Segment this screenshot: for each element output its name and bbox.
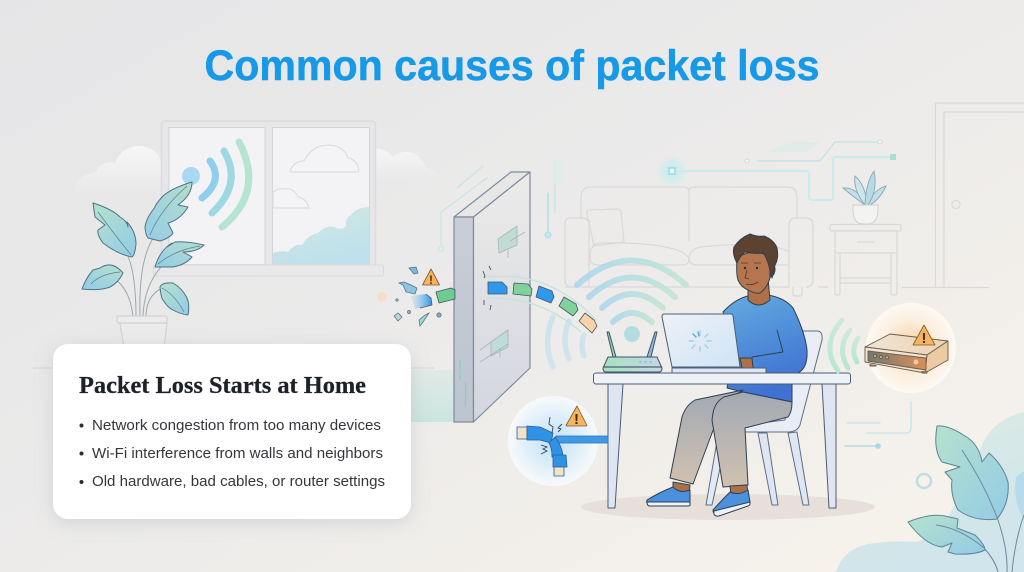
person: face: [737, 252, 770, 293]
left window pane: [169, 128, 265, 264]
wall: [454, 172, 530, 422]
packet: blue: [536, 286, 554, 303]
crack marks: [483, 266, 491, 310]
data packets: [411, 282, 597, 333]
decorative ring: [917, 474, 931, 488]
bullet list: Wi-Fi interference from walls and neighbors: [92, 446, 383, 462]
bullet list: Old hardware, bad cables, or router settings: [92, 474, 385, 490]
plant stems: [108, 230, 172, 317]
wall top: [454, 172, 530, 217]
outside clouds and hills: [273, 145, 369, 264]
old hardware callout: [865, 303, 956, 393]
router: [603, 332, 662, 372]
upper right leaf: [145, 182, 192, 241]
chair: [706, 331, 822, 505]
plant pot: [117, 316, 167, 348]
big leaf: [936, 426, 1008, 520]
room line art: door: [902, 103, 1024, 288]
packet: orange: [579, 313, 597, 333]
cable horizontal: [556, 436, 608, 443]
icon: window wi-fi signal: [182, 142, 249, 227]
person: rear ankle: [673, 482, 690, 495]
bullet list: Network congestion from too many devices: [92, 418, 381, 434]
cable connectors: [517, 426, 567, 476]
router body: [603, 357, 662, 372]
circuit lines: upper right: [656, 140, 896, 200]
person: front shoe: [713, 490, 750, 514]
person: front ankle: [730, 485, 748, 495]
person: facial features: [744, 267, 758, 269]
title: Common causes of packet loss: [204, 43, 820, 90]
icon: warning near wall: [422, 269, 440, 287]
person: hand: [740, 358, 753, 368]
desk left leg: [608, 384, 623, 508]
packet: green emerging: [436, 288, 455, 303]
plant: left: [82, 182, 204, 317]
circuit lines: lower right: [845, 402, 911, 449]
person: hair: [733, 234, 778, 278]
packet: green: [513, 283, 532, 296]
bottom right blob: [836, 412, 1024, 572]
packet debris: [377, 267, 441, 326]
packet stream guide lines: [487, 276, 597, 332]
wall front: [474, 172, 530, 422]
router wi-fi arcs: [577, 260, 686, 342]
right window pane: [272, 128, 370, 264]
packet: blue fading: [411, 294, 432, 309]
wall damage marks: [480, 226, 525, 362]
low leaf: [908, 515, 985, 554]
clouds behind window: [75, 146, 441, 193]
window: [154, 121, 384, 276]
small potted plant: [843, 171, 886, 224]
device: [865, 334, 948, 373]
lower left leaf: [82, 265, 123, 290]
person: sweater: [723, 295, 807, 402]
desk: [594, 373, 850, 508]
packet: green: [559, 297, 578, 316]
person: [647, 234, 807, 516]
icon: warning near wall: !: [429, 273, 433, 287]
icon: warning cable: !: [574, 411, 579, 428]
person: neck: [748, 278, 770, 305]
plant: bottom right: [836, 412, 1024, 572]
person: arm detail: [752, 330, 783, 357]
icon: warning device: !: [922, 330, 926, 347]
floor tint behind wall: [380, 370, 454, 422]
room line art: sofa: [565, 187, 828, 296]
info card: [53, 344, 411, 519]
desk shadow: [581, 494, 875, 520]
person: ear: [769, 264, 775, 277]
spark marks: [541, 417, 562, 454]
card heading: Packet Loss Starts at Home: [79, 373, 366, 399]
desk top: [594, 373, 850, 384]
right leaf: [155, 242, 204, 267]
laptop: [662, 314, 766, 373]
circuit lines: around wall: [438, 160, 563, 252]
old hardware arcs: [830, 320, 858, 371]
wall side: [454, 217, 474, 422]
left floor line: [33, 367, 434, 369]
laptop base: [672, 368, 766, 373]
packet: blue: [488, 282, 507, 294]
bullet list: [80, 418, 385, 490]
person: rear leg: [670, 390, 743, 484]
lower right leaf: [160, 283, 189, 315]
laptop screen: [662, 314, 740, 367]
upper left leaf: [93, 203, 136, 257]
broken cable callout: [508, 396, 608, 486]
router antennas: [607, 332, 616, 357]
loading spinner: [689, 331, 711, 351]
desk right leg: [822, 384, 836, 508]
person: rear shoe: [647, 487, 690, 504]
room line art: side table: [830, 224, 901, 295]
window sill: [154, 265, 384, 276]
person: front leg: [712, 392, 792, 487]
